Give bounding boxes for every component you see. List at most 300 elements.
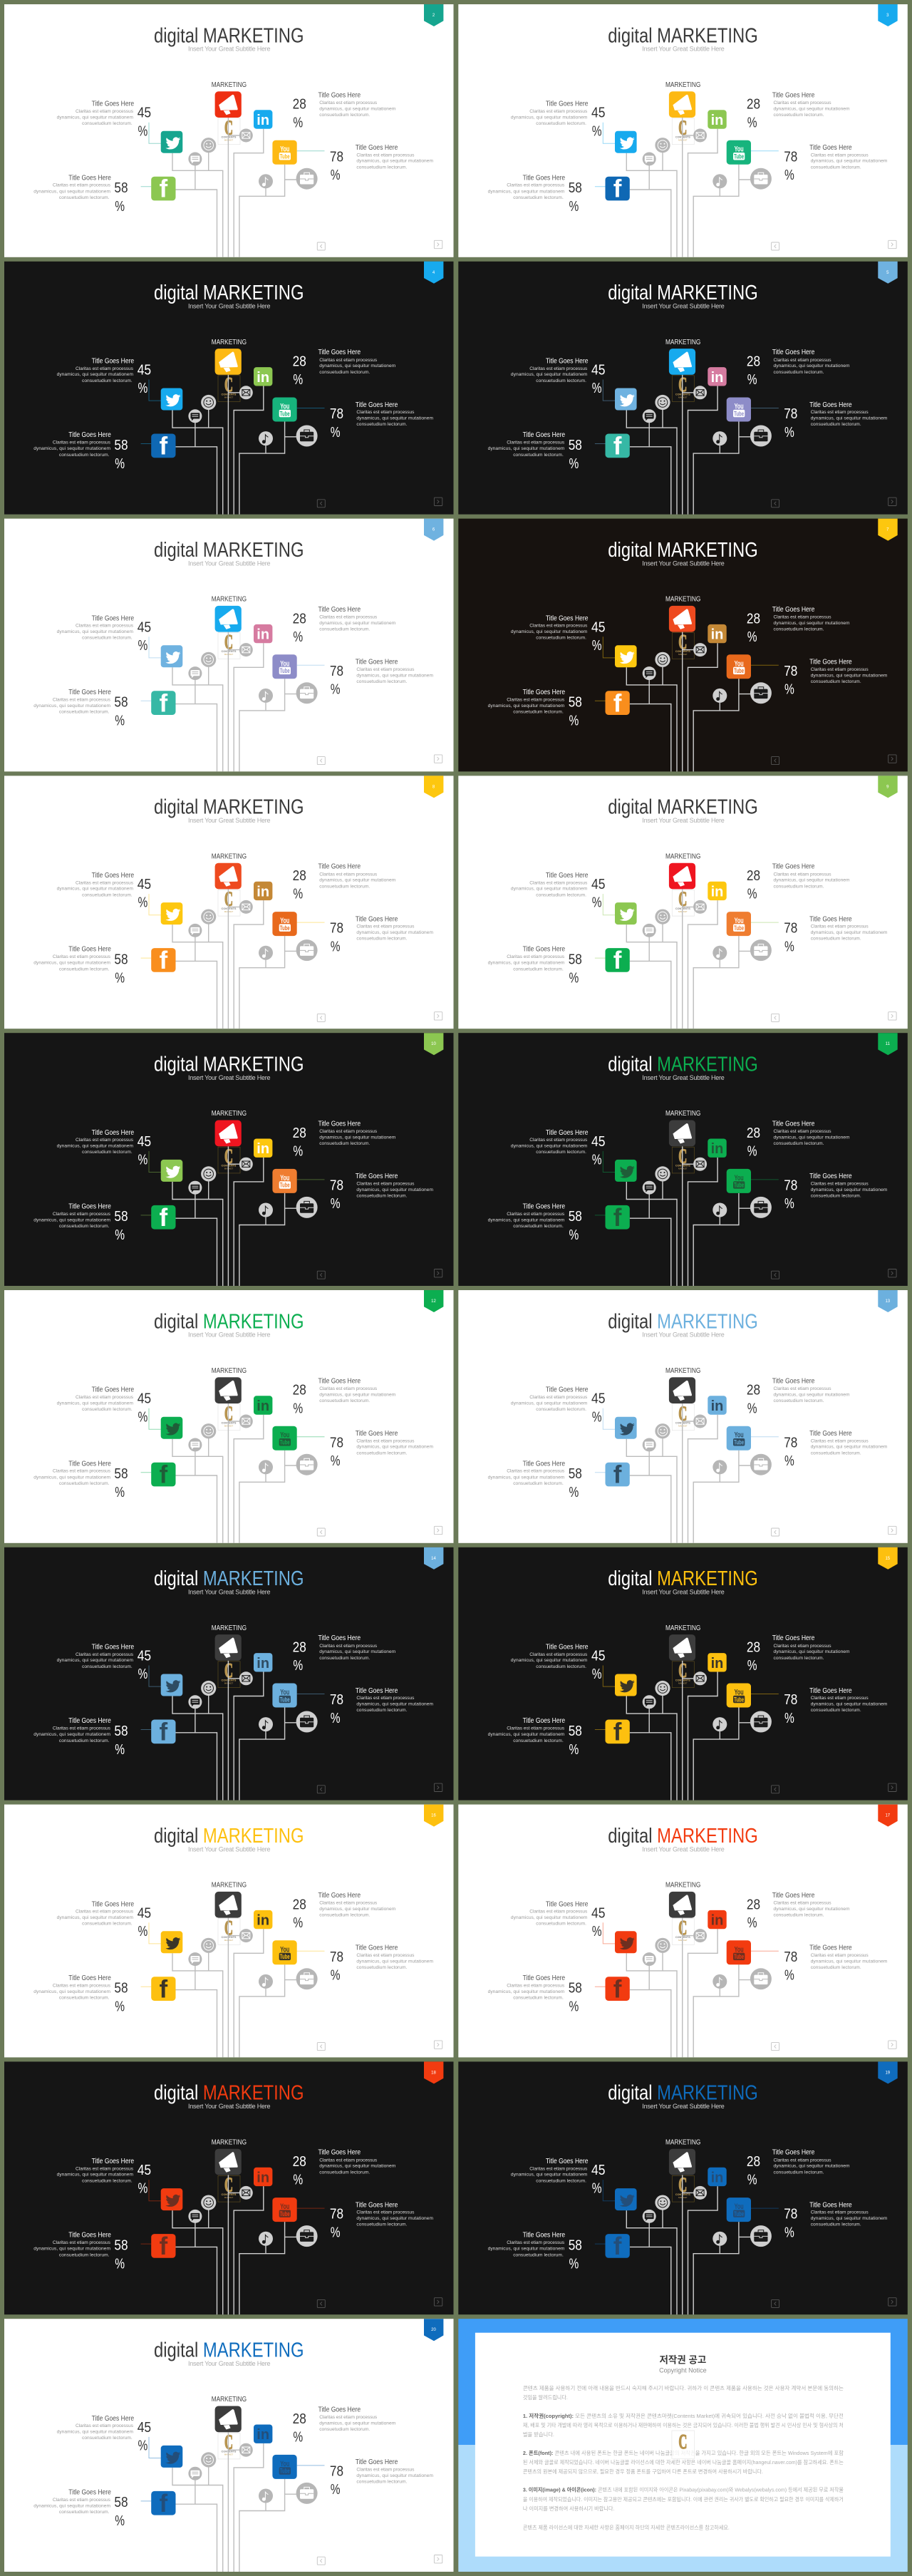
percent 45 [591,876,606,911]
icon: facebook: f [159,1975,167,2003]
text block 28: dynamicus, qui sequitur mutationem [774,1392,850,1397]
text block 45 [57,1642,134,1669]
text block 58 [33,2231,111,2257]
connector tree [172,1403,296,1543]
connector tree [172,632,296,771]
center label: MARKETING [665,852,701,860]
percent 58: 58 [114,2494,128,2510]
text block 78: consuetudium lectorum. [356,679,408,684]
text block 78: Title Goes Here [809,2200,852,2209]
icon: megaphone [215,1377,242,1403]
percent 58 [114,2494,128,2529]
percent 78: 78 [330,2206,343,2222]
icon: briefcase [750,1454,772,1475]
percent 58: % [569,1227,579,1243]
icon: twitter [615,1931,637,1953]
text block 28: dynamicus, qui sequitur mutationem [774,364,850,369]
icon: chat [188,666,202,680]
text block 78: Claritas est etiam processus [356,924,415,929]
text block 78: Title Goes Here [356,1686,398,1695]
text block 28 [772,91,850,118]
page tab: 15 [885,1557,891,1561]
icon: facebook [606,175,630,203]
icon: facebook [151,1975,175,2003]
percent 58: 58 [569,2237,582,2253]
subtitle: Insert Your Great Subtitle Here [188,560,271,567]
logo watermark [218,632,240,659]
icon: mail [239,1158,253,1171]
navigation arrows [772,755,896,765]
icon: youtube [727,2198,751,2222]
percent 78: 78 [784,1177,797,1193]
logo watermark [218,889,240,916]
icon: briefcase [750,1711,772,1732]
logo watermark: MARKET [224,653,233,656]
text block 78: consuetudium lectorum. [356,1965,408,1970]
icon: smile [201,1938,216,1953]
icon: chat [188,1181,202,1195]
page tab: 17 [885,1814,891,1818]
percent 45: 45 [591,1648,605,1664]
icon: facebook: f [159,689,167,717]
icon: linkedin [708,367,727,386]
logo watermark: MARKET [678,1424,688,1427]
text block 45: Title Goes Here [546,1386,589,1394]
icon: mail [239,386,253,399]
percent 28: 28 [747,1382,760,1398]
percent 28 [293,1382,306,1416]
text block 28: Title Goes Here [318,1634,361,1642]
percent 78: 78 [330,1949,343,1965]
logo watermark: C [224,374,233,396]
page tab [878,1290,898,1312]
percent 28 [747,96,760,130]
page tab: 14 [431,1557,436,1561]
text block 45: Title Goes Here [546,1643,589,1652]
title: digital MARKETING [608,796,758,819]
title: digital MARKETING [608,1825,758,1848]
text block 58: dynamicus, qui sequitur mutationem [488,1989,565,1994]
icon: megaphone [669,91,695,118]
section 1 copyright: 1. 저작권(copyright): 모든 콘텐츠의 소유 및 저작권은 콘텐츠마켓(Contents Market)에 귀속되어 있습니다. 사전 승낙 없이 불법적 이용, 무단전 [523,2413,844,2419]
icon: twitter [161,1674,182,1696]
icon: youtube: Tube [280,410,290,417]
icon: twitter [161,2446,182,2468]
percent 78: 78 [330,920,343,937]
accent connectors [595,894,779,958]
text block 28 [772,348,850,375]
text block 45: dynamicus, qui sequitur mutationem [57,2173,134,2178]
text block 58: consuetudium lectorum. [59,2510,110,2515]
text block 58: Claritas est etiam processus [53,954,111,959]
text block 58: Title Goes Here [68,2488,111,2496]
page tab [424,2061,443,2083]
text block 58: dynamicus, qui sequitur mutationem [488,1217,565,1222]
percent 78: % [331,2481,341,2498]
percent 28: 28 [747,867,760,884]
icon: chat [188,409,202,423]
accent connectors [141,1151,325,1215]
icon: youtube [272,1684,297,1708]
text block 45 [57,356,134,383]
icon: youtube: You [280,145,289,154]
text block 78: dynamicus, qui sequitur mutationem [356,1445,433,1450]
page tab: 12 [431,1299,436,1304]
percent 78: 78 [330,148,343,165]
center label: MARKETING [665,2138,701,2146]
logo watermark: CONTENTS [675,393,690,396]
accent connectors [141,379,325,443]
text block 28: Title Goes Here [318,1119,361,1128]
icon: linkedin [254,1910,272,1929]
percent 45: % [138,2180,147,2197]
text block 45: Claritas est etiam processus [76,1138,134,1143]
icon: youtube [272,1426,297,1451]
text block 58 [488,431,565,458]
text block 58 [33,1974,111,2001]
text block 45 [57,1386,134,1412]
text block 78: dynamicus, qui sequitur mutationem [811,1445,888,1450]
percent 28: 28 [293,353,306,369]
text block 78: dynamicus, qui sequitur mutationem [811,673,888,678]
text block 58: Claritas est etiam processus [507,1983,565,1988]
text block 78: Title Goes Here [356,1944,398,1952]
text block 58: dynamicus, qui sequitur mutationem [33,189,110,194]
text block 28 [318,2148,396,2175]
icon: mail [239,128,253,143]
icon: youtube: Tube [280,1438,290,1446]
logo watermark: C [678,889,687,911]
text block 58: Claritas est etiam processus [53,697,111,702]
text block 78 [809,401,888,427]
percent 78: % [331,1710,341,1726]
percent 58: % [569,969,579,986]
percent 45: % [138,1923,147,1939]
logo watermark: CONTENTS [222,393,237,396]
text block 58 [33,431,111,458]
navigation arrows [772,1012,896,1021]
percent 45: 45 [591,876,605,892]
text block 58: dynamicus, qui sequitur mutationem [488,1475,565,1480]
text block 45: dynamicus, qui sequitur mutationem [57,887,134,892]
text block 58: Title Goes Here [523,945,565,954]
logo watermark: C [678,374,687,396]
text block 28: Claritas est etiam processus [319,1644,378,1649]
text block 58: dynamicus, qui sequitur mutationem [488,2247,565,2252]
icon: music [259,1460,273,1474]
slide 14 [4,1547,453,1800]
text block 58: Claritas est etiam processus [53,2498,111,2503]
copyright heading: 저작권 공고 [659,2354,706,2365]
slide 13 [458,1290,908,1543]
text block 28: dynamicus, qui sequitur mutationem [774,878,850,883]
icon: twitter [615,902,637,924]
connector tree [626,1403,750,1543]
text block 45: consuetudium lectorum. [82,1664,133,1669]
percent 58: 58 [114,1723,128,1739]
icon: twitter [615,1674,637,1696]
text block 58: Claritas est etiam processus [507,440,565,445]
percent 58: 58 [114,694,128,711]
text block 58: consuetudium lectorum. [513,2252,564,2257]
icon: mail [239,2186,253,2200]
page tab [878,1547,898,1570]
text block 45 [511,2157,589,2183]
text block 28: Title Goes Here [318,1891,361,1900]
icon: chat [643,1438,656,1451]
icon: youtube: Tube [280,667,290,674]
icon: mail [693,1929,707,1942]
percent 78: % [784,1453,794,1469]
intro paragraph: 콘텐츠 제품을 사용하기 전에 아래 내용을 반드시 숙지해 주시기 바랍니다. 귀하가 이 콘텐츠 제품을 사용하는 것은 사용자 계약서 본문에 동의하는 [523,2385,844,2391]
text block 58 [33,1716,111,1743]
icon: music [259,946,273,960]
icon: smile [201,910,216,924]
text block 28: Title Goes Here [772,1634,815,1642]
icon: smile [655,2195,670,2210]
icon: linkedin [708,2168,727,2186]
text block 78: consuetudium lectorum. [356,1451,408,1456]
text block 78: consuetudium lectorum. [811,1708,861,1713]
text block 28: Claritas est etiam processus [774,358,831,363]
accent connectors [141,2180,325,2244]
text block 45: Claritas est etiam processus [529,2166,588,2171]
page tab [878,4,898,26]
connector tree [626,375,750,515]
percent 28: 28 [293,867,306,884]
percent 58: 58 [569,951,582,967]
percent 78: % [784,938,794,954]
text block 45: Claritas est etiam processus [529,624,588,629]
icon: megaphone [215,1120,242,1146]
icon: briefcase [296,682,318,704]
percent 28: 28 [293,1382,306,1398]
text block 28: Claritas est etiam processus [319,1901,378,1906]
text block 78: dynamicus, qui sequitur mutationem [356,1702,433,1707]
percent 58: 58 [114,1980,128,1997]
text block 58: Title Goes Here [523,1459,565,1468]
icon: youtube: Tube [280,1696,290,1703]
icon: facebook [606,432,630,460]
icon: youtube: You [735,145,744,154]
logo watermark: CONTENTS [222,1165,237,1168]
percent 28: % [293,371,303,388]
percent 45: % [592,2180,602,2197]
text block 78 [809,1944,888,1970]
icon: youtube: Tube [734,153,744,160]
logo watermark: CONTENTS [222,1936,237,1939]
logo watermark [218,1660,240,1688]
text block 78 [809,1172,888,1199]
text block 78: dynamicus, qui sequitur mutationem [356,416,433,421]
text block 45: Title Goes Here [546,871,589,880]
icon: facebook: f [159,432,167,460]
icon: facebook: f [159,1719,167,1746]
text block 58: consuetudium lectorum. [513,1738,564,1743]
text block 78: dynamicus, qui sequitur mutationem [356,159,433,164]
icon: youtube: Tube [734,410,744,417]
text block 78: Title Goes Here [809,658,852,666]
icon: megaphone [215,2406,242,2432]
text block 58: Title Goes Here [68,1716,111,1725]
icon: youtube: You [280,2460,289,2468]
logo watermark: CONTENTS [675,1936,690,1939]
text block 58: dynamicus, qui sequitur mutationem [33,446,110,451]
text block 28: Title Goes Here [318,2148,361,2157]
slide 8 [4,776,453,1029]
subtitle: Insert Your Great Subtitle Here [188,2103,271,2110]
connector tree [626,2175,750,2314]
icon: linkedin: in [711,370,723,386]
logo watermark: C [678,1660,687,1682]
text block 58 [488,1459,565,1486]
logo watermark: C [224,1145,233,1168]
text block 45: Title Goes Here [92,1643,134,1652]
icon: linkedin: in [711,1398,723,1414]
section 1 copyright [523,2413,844,2438]
text block 45: dynamicus, qui sequitur mutationem [57,1915,134,1920]
section 1 copyright: 재, 배포 및 기타 개발에 따라 영리 목적으로 이용하거나 재판매하여 이용하는 것은 금지되어 있습니다. 이러한 불법 행위 발견 시 민사상 민사 및 형사상의 처 [523,2422,844,2428]
text block 45: consuetudium lectorum. [536,1664,586,1669]
icon: youtube: You [280,1689,289,1697]
icon: youtube: You [735,1174,744,1183]
navigation arrows [772,498,896,508]
percent 28: % [293,2172,303,2188]
text block 78: consuetudium lectorum. [811,1451,861,1456]
text block 28 [318,2405,396,2432]
icon: facebook: f [159,2232,167,2260]
text block 28: dynamicus, qui sequitur mutationem [319,2421,396,2426]
section 2 font: 된 서체와 글꼴로 제작되었습니다. 네이버 나눔글꼴 라이선스에 대한 자세한 사항은 네이버 나눔글꼴 홈페이지(hangeul.naver.com)를 참고하세요. 폰트는 [523,2459,844,2466]
percent 78: 78 [330,406,343,422]
icon: music [712,946,727,960]
percent 28: % [747,2172,757,2188]
percent 45 [138,2419,151,2453]
percent 45: 45 [138,361,151,378]
icon: mail [693,128,707,143]
text block 58 [488,945,565,972]
percent 78: % [331,2224,341,2240]
logo watermark: MARKET [678,396,688,398]
text block 45: dynamicus, qui sequitur mutationem [57,2429,134,2434]
text block 45: Claritas est etiam processus [529,366,588,371]
icon: chat [643,409,656,423]
icon: music [259,1974,273,1989]
text block 28: Title Goes Here [318,605,361,614]
icon: briefcase [750,1197,772,1218]
text block 28: Claritas est etiam processus [319,872,378,877]
percent 45: % [138,637,147,654]
navigation arrows [317,2555,442,2565]
percent 78: 78 [784,1434,797,1451]
accent connectors [595,1151,779,1215]
text block 45: Claritas est etiam processus [76,1910,134,1915]
text block 45: consuetudium lectorum. [82,121,133,126]
text block 58 [33,2488,111,2515]
text block 78: Title Goes Here [356,658,398,666]
percent 45: % [138,895,147,911]
percent 78 [330,406,343,441]
text block 45: Claritas est etiam processus [529,880,588,885]
center label: MARKETING [665,1367,701,1375]
text block 45: dynamicus, qui sequitur mutationem [511,1915,588,1920]
text block 78 [809,143,888,170]
percent 45 [138,1133,151,1168]
navigation arrows [772,1526,896,1536]
text block 58: dynamicus, qui sequitur mutationem [33,2503,110,2508]
text block 58: consuetudium lectorum. [59,1996,110,2001]
section 3 image and icon [523,2487,844,2512]
text block 45: dynamicus, qui sequitur mutationem [511,372,588,377]
percent 45: 45 [591,619,605,635]
icon: music [259,1203,273,1217]
icon: mail [239,1929,253,1942]
percent 45 [138,876,151,911]
icon: twitter [161,2188,182,2210]
logo watermark: CONTENTS [222,1421,237,1424]
text block 28: Claritas est etiam processus [774,615,831,620]
text block 45: Title Goes Here [92,356,134,365]
text block 28: dynamicus, qui sequitur mutationem [319,106,396,111]
text block 58: Claritas est etiam processus [53,183,111,188]
logo watermark: MARKET [678,138,688,141]
icon: music [712,1460,727,1474]
percent 45: 45 [138,1391,151,1407]
percent 28: 28 [747,96,760,113]
percent 78: % [331,424,341,441]
icon: youtube: Tube [734,667,744,674]
percent 28: % [747,371,757,388]
percent 78: % [784,424,794,441]
center label: MARKETING [212,81,247,89]
page tab [424,1805,443,1827]
icon: smile [655,652,670,667]
percent 45: 45 [591,1905,605,1921]
text block 45: dynamicus, qui sequitur mutationem [511,887,588,892]
accent connectors [595,1922,779,1987]
icon: facebook [151,175,175,203]
percent 45: 45 [591,1133,605,1150]
title: digital MARKETING [154,282,304,304]
icon: facebook [151,1718,175,1746]
icon: facebook: f [159,1204,167,1232]
icon: linkedin: in [256,884,269,900]
percent 28 [293,2153,306,2188]
subtitle: Insert Your Great Subtitle Here [188,1589,271,1596]
page tab [424,1033,443,1055]
copyright notice slide [458,2319,908,2572]
logo watermark [218,2432,240,2459]
percent 28: % [293,2428,303,2445]
percent 58: % [115,1741,125,1758]
navigation arrows [317,498,442,508]
text block 78: dynamicus, qui sequitur mutationem [811,159,888,164]
text block 45: consuetudium lectorum. [82,378,133,383]
text block 78: dynamicus, qui sequitur mutationem [356,2473,433,2478]
navigation arrows [317,1269,442,1279]
icon: linkedin [254,2168,272,2186]
icon: youtube [727,140,751,165]
text block 58 [33,1202,111,1229]
slide 6 [4,519,453,771]
text block 28: Claritas est etiam processus [774,101,831,105]
icon: twitter [615,388,637,411]
slide 9 [458,776,908,1029]
slide 12 [4,1290,453,1543]
text block 45: Title Goes Here [92,2157,134,2165]
text block 58: Claritas est etiam processus [507,1469,565,1474]
logo watermark [218,117,240,145]
